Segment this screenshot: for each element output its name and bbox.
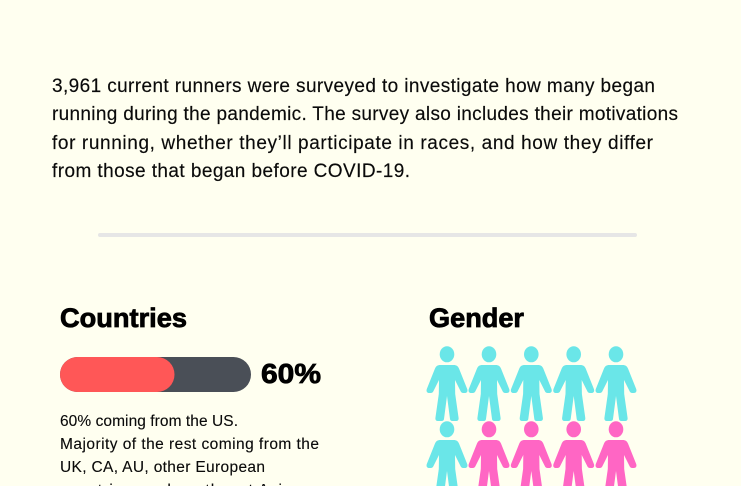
countries description: UK, CA, AU, other European	[60, 459, 265, 476]
intro text block: for running, whether they’ll participate in races, and how they differ	[52, 133, 654, 154]
intro text block	[52, 76, 678, 182]
panel: gender	[427, 303, 636, 486]
value: 60%: 60%	[261, 358, 321, 389]
intro text block: running during the pandemic. The survey also includes their motivations	[52, 104, 678, 125]
intro text block: 3,961 current runners were surveyed to investigate how many began	[52, 76, 655, 97]
intro text block: from those that began before COVID-19.	[52, 161, 410, 182]
countries description: 60% coming from the US.	[60, 413, 238, 430]
countries description	[60, 413, 319, 486]
panel: countries	[60, 303, 321, 486]
progress bar: 60%	[60, 357, 251, 392]
heading: countries: Countries	[60, 303, 187, 333]
pictogram: gender split	[427, 346, 636, 486]
countries description: Majority of the rest coming from the	[60, 436, 319, 453]
heading: gender: Gender	[429, 303, 524, 333]
